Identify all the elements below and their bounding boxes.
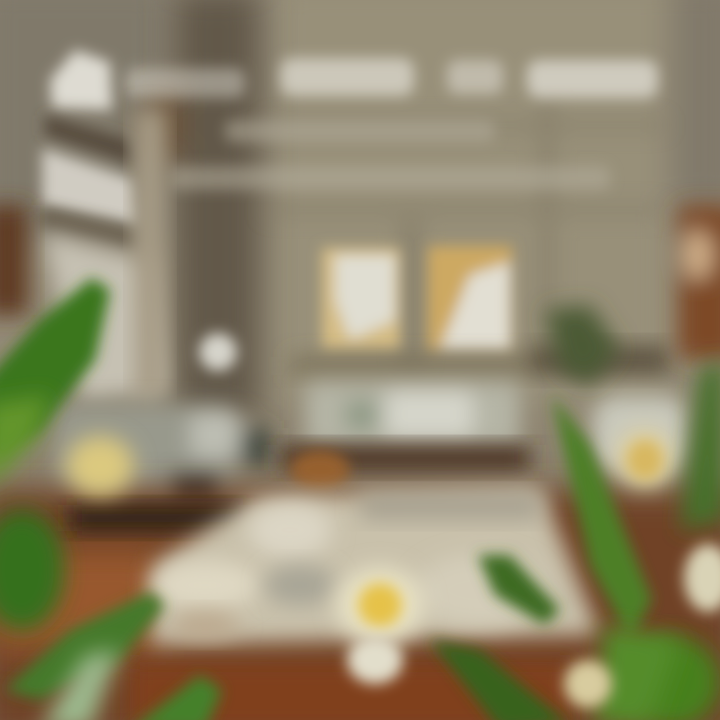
rug [150, 487, 600, 645]
flower: center [336, 567, 424, 684]
flower: right upper [592, 396, 688, 488]
subheading: blurred text lines [170, 120, 610, 190]
left side brown furniture [0, 205, 28, 315]
wooden stool [290, 450, 350, 490]
dark band behind sofa [290, 345, 670, 376]
flower: right edge and bottom [564, 544, 720, 708]
plant: left foreground leaves [0, 278, 222, 720]
wall: panels [0, 0, 720, 400]
wall panel grid lines [265, 100, 665, 370]
right brown furniture [678, 205, 720, 360]
left sofa / armchair [55, 405, 270, 512]
paintings [322, 246, 512, 352]
painting right [428, 246, 512, 352]
painting left [322, 248, 400, 350]
sofa [305, 382, 520, 448]
wall lamp [199, 333, 237, 371]
shelf: white bookcase on left [42, 50, 165, 400]
floor: wood [0, 445, 720, 720]
flower: left yellow [66, 436, 134, 496]
dark column [150, 0, 260, 420]
heading: blurred title text [125, 58, 658, 98]
plant: right foreground leaves [430, 305, 720, 720]
